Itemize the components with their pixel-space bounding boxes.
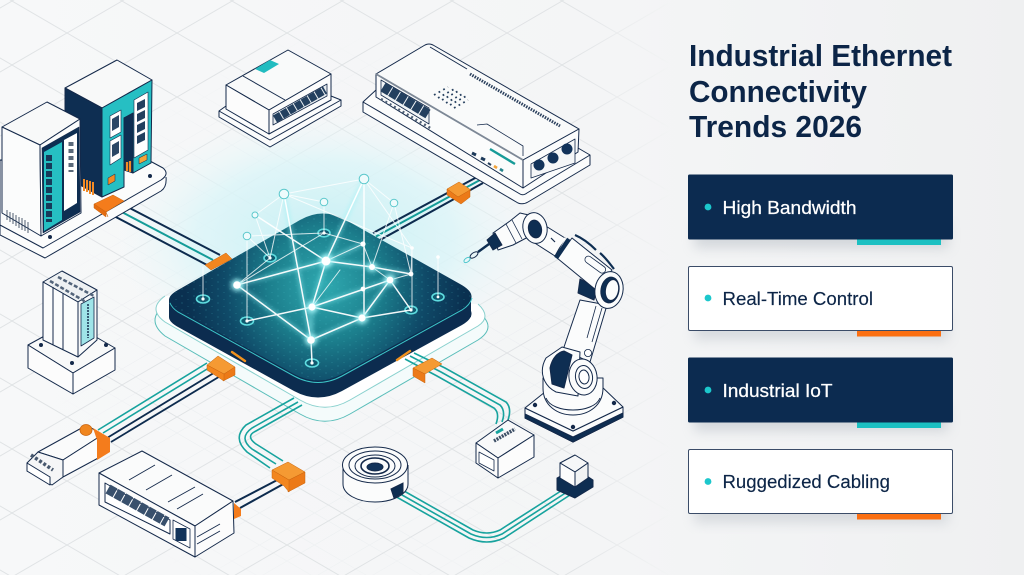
connector: sensor cable	[413, 358, 442, 383]
device: small top switch	[219, 50, 341, 147]
central platform	[169, 214, 472, 398]
glowing network	[196, 174, 444, 367]
plate bolts	[48, 235, 52, 239]
floating ring nodes	[243, 174, 398, 240]
device: bottom switch	[99, 451, 241, 557]
card: Ruggedized Cabling	[688, 450, 952, 523]
connector: top switch	[447, 182, 471, 204]
forearm	[528, 215, 565, 256]
cable: platform to bottom switch	[235, 398, 302, 508]
connector: platform left	[205, 253, 232, 270]
title	[689, 38, 952, 144]
vent dots	[434, 87, 468, 108]
title: Connectivity	[689, 74, 868, 109]
device: small cube on navy mount	[557, 455, 593, 498]
shoulder disc	[520, 210, 550, 246]
cable: left cabinet to platform	[112, 204, 220, 265]
card: High Bandwidth: High Bandwidth	[722, 197, 856, 218]
teal cabinet	[65, 60, 152, 197]
card: Real-Time Control	[688, 266, 952, 340]
card: Industrial IoT: Industrial IoT	[722, 380, 832, 401]
left port bank	[381, 80, 429, 124]
base plate	[525, 407, 623, 442]
network links	[203, 179, 438, 363]
device: sensor box	[476, 420, 534, 478]
cable: coil to small cube	[393, 487, 570, 542]
white cabinet	[2, 102, 81, 236]
device: white cabinet and teal cabinet on base plate	[0, 60, 166, 258]
teal status bar	[490, 149, 515, 164]
lower arm	[563, 300, 607, 362]
connector: left cabinet	[94, 195, 124, 217]
lower joint	[542, 347, 580, 396]
device: cable coil	[342, 447, 408, 502]
device: large top switch	[363, 44, 590, 204]
card: Ruggedized Cabling: Ruggedized Cabling	[722, 471, 890, 492]
connector: bottom switch cable	[272, 462, 305, 492]
navy elbow neck	[578, 279, 597, 300]
bright nodes	[201, 231, 440, 365]
cable: platform to sensor box	[405, 353, 510, 424]
device: stacked modules on pedestal	[28, 271, 115, 394]
cable: top switch to platform	[373, 173, 487, 240]
platform top	[169, 214, 472, 380]
card: Real-Time Control: Real-Time Control	[722, 288, 873, 309]
floor rings	[196, 229, 444, 367]
indicators	[472, 153, 485, 160]
platform base rings	[155, 296, 488, 421]
wrist	[493, 213, 533, 250]
platform side	[169, 230, 472, 398]
title: Trends 2026	[689, 109, 862, 144]
title: Industrial Ethernet	[689, 38, 952, 73]
elbow disc	[592, 269, 626, 311]
base plate	[0, 160, 166, 258]
network glow	[237, 179, 411, 340]
cable: platform to transceiver	[98, 363, 222, 442]
device: transceiver	[27, 424, 110, 485]
platform rim	[170, 298, 472, 382]
top slot row	[470, 74, 560, 126]
card: Industrial IoT	[688, 358, 953, 431]
connector: transceiver cable	[207, 356, 235, 381]
right port bank	[531, 139, 575, 178]
card: High Bandwidth	[688, 174, 953, 248]
bright node halos	[231, 254, 396, 346]
tool	[487, 233, 502, 250]
upper arm	[557, 238, 612, 290]
robot arm	[463, 210, 626, 442]
turret	[543, 378, 603, 415]
